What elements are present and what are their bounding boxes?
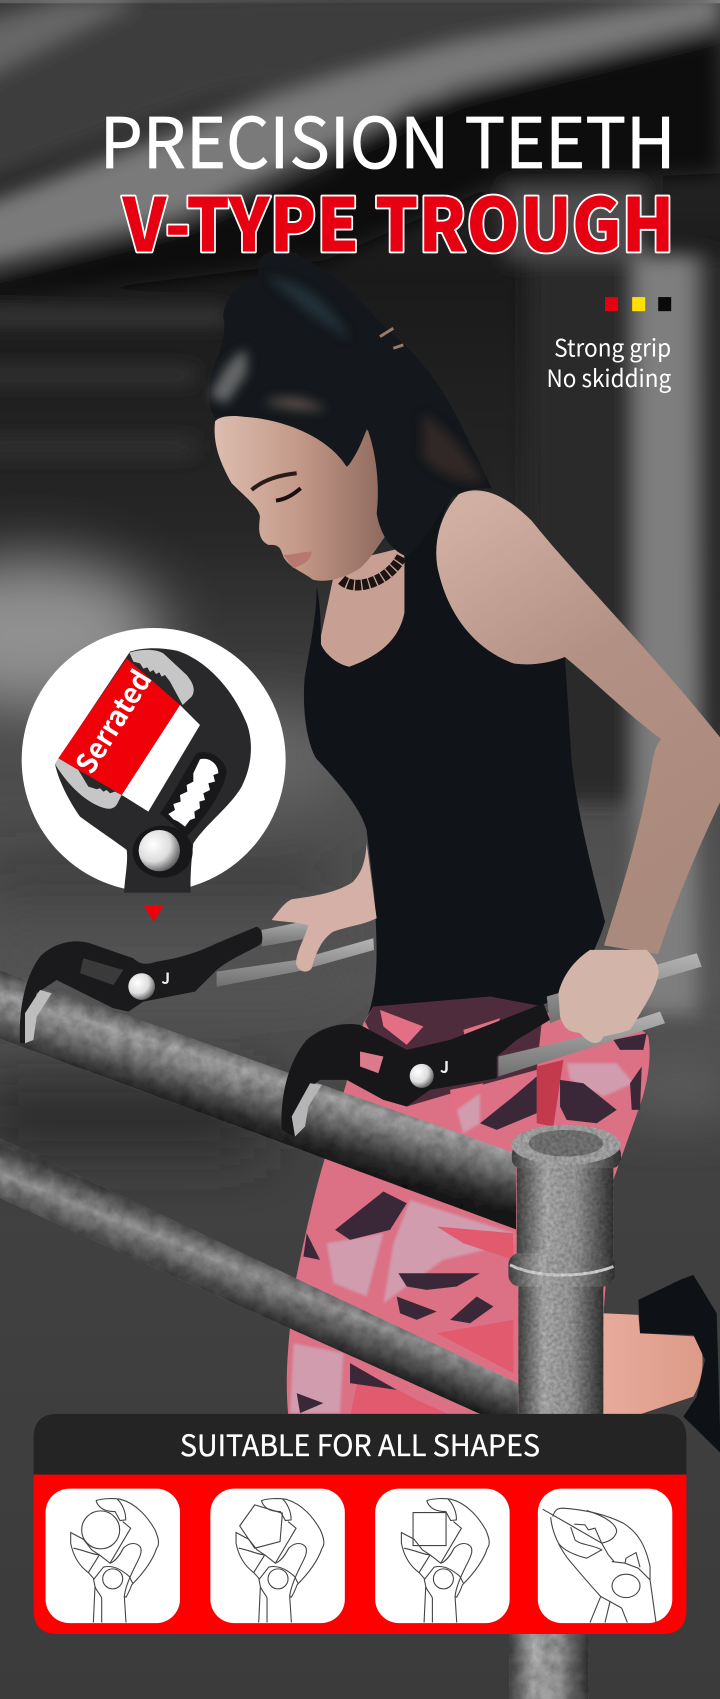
hair (209, 250, 492, 557)
red label band (58, 658, 180, 795)
hair highlights (210, 277, 483, 483)
sub text (547, 329, 672, 394)
pivot ball (128, 973, 155, 1000)
colour squares (605, 297, 671, 311)
logo: J (440, 1054, 449, 1078)
woman figure (209, 250, 720, 1453)
pivot ring and ball (133, 826, 193, 878)
inset magnifier: serrated jaw (22, 628, 286, 922)
lower silver jaw (55, 758, 122, 809)
panel heading: SUITABLE FOR ALL SHAPES (180, 1423, 540, 1465)
head (209, 250, 492, 585)
collar ring (508, 1253, 615, 1287)
adjusting slot frame (160, 752, 227, 837)
lower rail pipe (0, 1138, 518, 1431)
upper post (517, 1163, 613, 1258)
pivot ball (410, 1064, 434, 1088)
wrench on upper rail, far side (20, 843, 377, 1043)
red strap (537, 1060, 563, 1127)
title: precision teeth: PRECISION TEETH (100, 88, 676, 188)
tile: hex nut (210, 1489, 345, 1623)
panel: suitable for all shapes (34, 1414, 686, 1634)
leggings (287, 997, 720, 1453)
hand on handle (272, 843, 377, 972)
maroon waist shadow (365, 997, 543, 1107)
slot (80, 958, 123, 985)
black body (281, 1003, 550, 1137)
adjusting slot opening (168, 759, 218, 827)
lower handle (217, 938, 374, 987)
tile: round pipe (46, 1489, 180, 1623)
icon: hex nut (236, 1499, 324, 1623)
red pointer triangle (144, 906, 163, 922)
wrench on upper rail, near side (281, 950, 702, 1137)
white highlight block (122, 705, 200, 812)
pink waist patches (380, 1010, 500, 1117)
sub text: No skidding (547, 359, 672, 394)
pale camouflage patches (290, 1063, 633, 1413)
post section below banner (510, 1626, 589, 1699)
upper rail pipe (0, 970, 516, 1230)
logo: J (161, 967, 170, 989)
neck and chest skin (319, 548, 410, 672)
coral and red patches (350, 1227, 513, 1417)
hair tie (380, 328, 403, 348)
raised arm (436, 490, 720, 954)
icon: square bar (401, 1499, 489, 1623)
eyebrow (252, 473, 297, 490)
panel header (34, 1414, 686, 1475)
panel body (34, 1475, 686, 1634)
tile: square bar (375, 1489, 510, 1623)
silver jaw (25, 990, 52, 1043)
silver jaw (292, 1083, 322, 1137)
tank top (304, 490, 605, 1027)
lower post (518, 1287, 603, 1417)
black wrench body (20, 927, 262, 1043)
upper silver jaw (129, 650, 194, 705)
gripping hand (558, 950, 659, 1043)
upper handle (262, 918, 333, 947)
black sock (638, 1275, 720, 1453)
slot with leggings behind (360, 1052, 383, 1073)
sub text: Strong grip (554, 329, 671, 364)
choker necklace (342, 557, 402, 585)
label: Serrated: Serrated (65, 662, 160, 781)
icon: flat grip (543, 1508, 656, 1623)
tile: flat grip (538, 1489, 672, 1623)
closed eye (276, 488, 301, 501)
face (215, 416, 385, 581)
post cap (512, 1145, 621, 1168)
dark camouflage patches (297, 1033, 647, 1413)
black wrench head (55, 648, 251, 893)
white circle (22, 628, 286, 892)
vertical post (508, 1125, 621, 1417)
upper handle (547, 953, 702, 1023)
title: v-type trough: V-TYPE TROUGH (122, 167, 674, 274)
lower handle (498, 1012, 665, 1077)
icon: round pipe (71, 1499, 159, 1623)
right leg (597, 1313, 703, 1417)
lips (283, 552, 312, 568)
